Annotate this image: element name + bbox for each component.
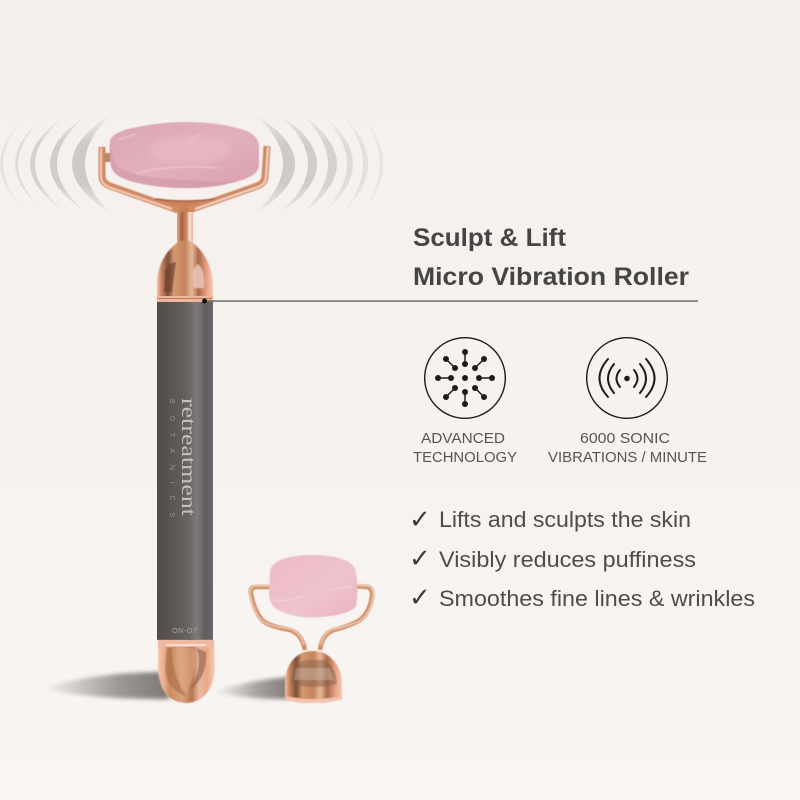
callout leader line <box>202 298 698 304</box>
title: Sculpt & Lift <box>413 224 567 252</box>
rose quartz stone <box>110 122 259 188</box>
label: sonic vibrations <box>548 431 707 466</box>
benefit: lifts: Lifts and sculpts the skin <box>439 507 691 532</box>
bottom metal cap <box>158 640 215 703</box>
label: advanced technology: ADVANCED <box>421 431 505 447</box>
mini stone <box>269 555 358 617</box>
icon: sonic vibrations <box>587 338 667 418</box>
mini bell <box>285 651 342 703</box>
vibration waves <box>0 113 383 215</box>
large roller product <box>101 122 268 703</box>
model label: ON-O7 <box>172 626 197 635</box>
title <box>413 224 689 291</box>
brand text: BOTANICS <box>168 399 175 517</box>
benefit: puffiness: Visibly reduces puffiness <box>439 547 696 572</box>
grey handle <box>157 302 213 640</box>
benefit: fine lines: Smoothes fine lines & wrinkles <box>439 586 755 611</box>
benefit: fine lines: ✓ <box>409 583 431 613</box>
stem <box>177 212 193 243</box>
benefit: puffiness: ✓ <box>409 544 431 574</box>
label: sonic vibrations: VIBRATIONS / MINUTE <box>548 450 707 466</box>
icon: advanced technology <box>425 338 505 418</box>
mini frame <box>250 585 373 650</box>
brand text <box>168 398 199 517</box>
bottom cap band <box>158 640 214 647</box>
label: advanced technology <box>413 431 517 466</box>
brand text: retreatment <box>177 398 199 517</box>
cap band <box>157 296 213 302</box>
roller frame <box>101 146 268 213</box>
top metal cap <box>157 240 213 302</box>
mini roller product <box>250 555 373 703</box>
title: Micro Vibration Roller <box>413 263 689 291</box>
benefits list <box>409 505 755 613</box>
label: sonic vibrations: 6000 SONIC <box>580 431 670 447</box>
shadows under product <box>40 672 290 699</box>
label: advanced technology: TECHNOLOGY <box>413 450 517 466</box>
benefit: lifts: ✓ <box>409 505 431 535</box>
